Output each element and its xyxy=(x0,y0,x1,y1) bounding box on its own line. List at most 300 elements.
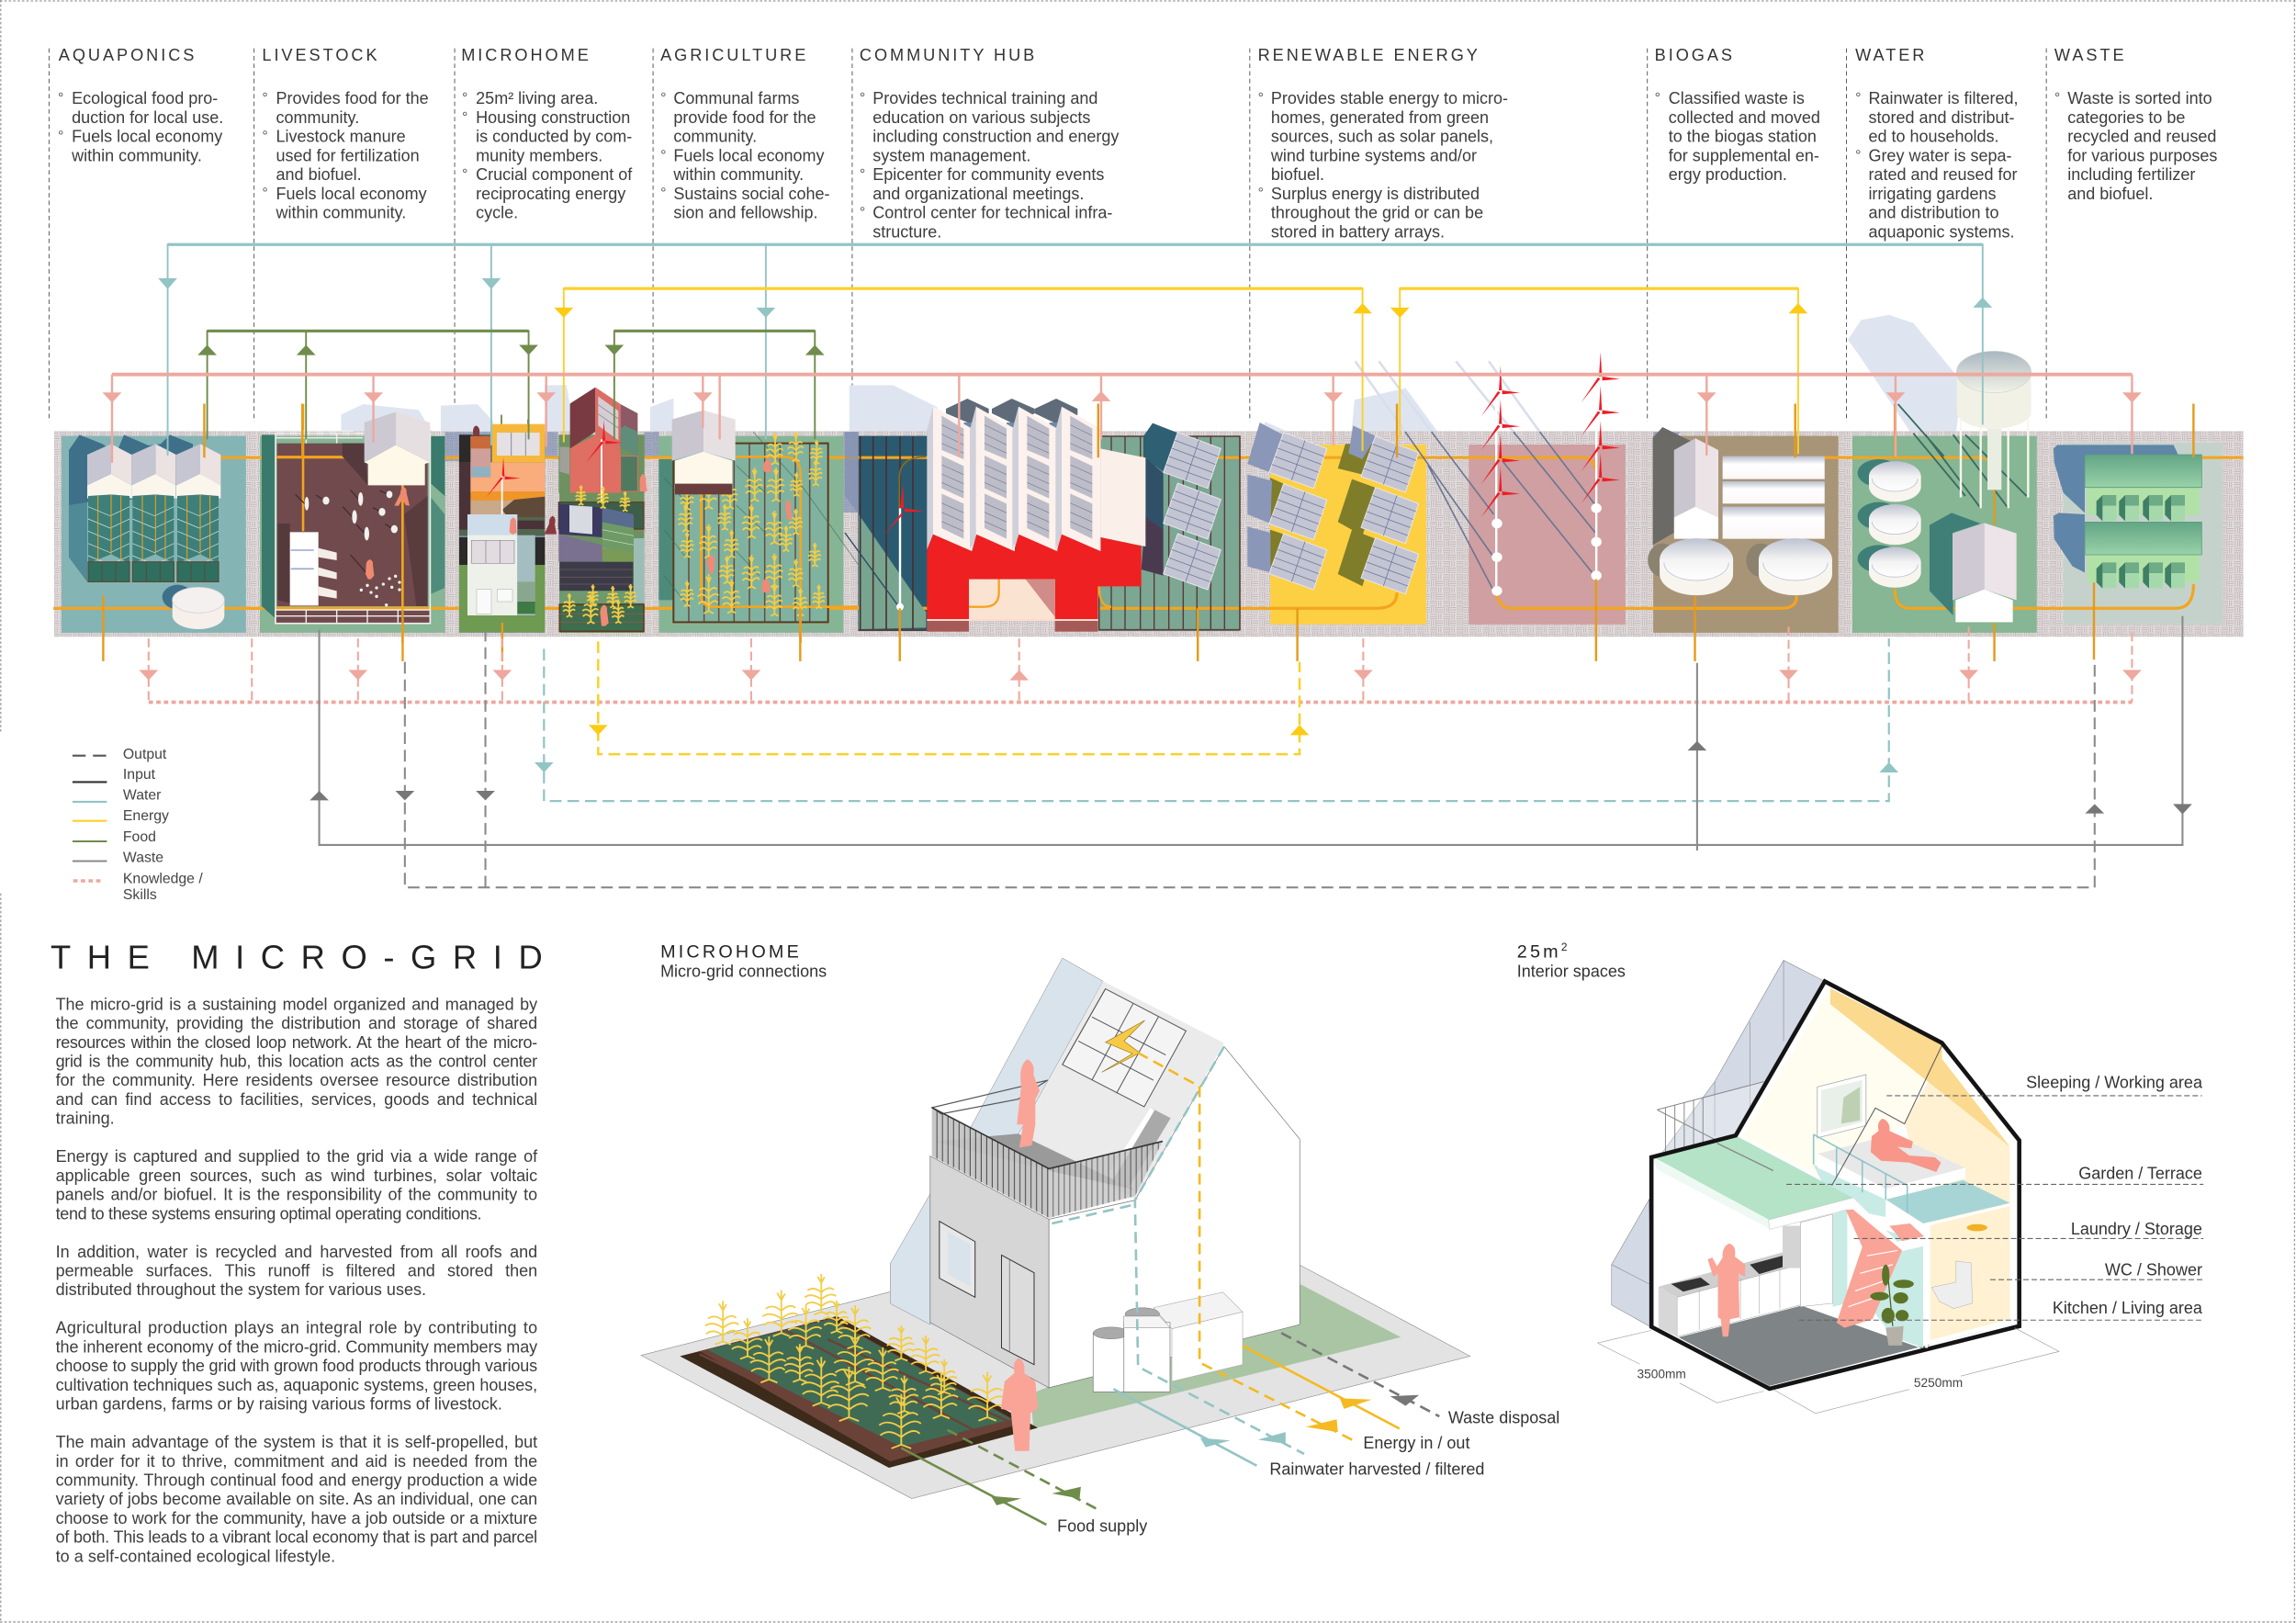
bullets: ° xyxy=(660,91,666,107)
paragraph 5: variety of jobs become available on site. As an individual, one can xyxy=(56,1490,537,1508)
bullet text: cycle. xyxy=(476,204,518,222)
plot: biogas xyxy=(1653,435,1839,633)
food arrows xyxy=(197,344,825,355)
plot: waste xyxy=(2063,443,2223,625)
reclining person xyxy=(1871,1119,1941,1172)
hub red base xyxy=(927,535,1142,619)
blue solar shadows on the paving xyxy=(1247,423,1376,572)
heading: RENEWABLE ENERGY xyxy=(1258,46,1480,64)
paragraph 1: for the community. Here residents oversee resource distribution xyxy=(56,1071,537,1089)
bullet text: structure. xyxy=(872,222,941,241)
bullet text: Fuels local economy xyxy=(276,185,427,203)
house shell xyxy=(1651,981,2020,1389)
legend: waste: Waste xyxy=(123,850,163,865)
water house xyxy=(1953,523,2017,622)
bullet text: Fuels local economy xyxy=(673,146,824,164)
map band of the closed-loop site xyxy=(53,351,2244,661)
heading: AQUAPONICS xyxy=(59,46,197,64)
paragraph 3: permeable surfaces. This runoff is filtered and stored then xyxy=(56,1262,537,1280)
sloped ceiling xyxy=(1830,988,2009,1146)
heading: microhome: Micro-grid connections xyxy=(660,962,827,980)
bullets: ° xyxy=(262,91,268,107)
legend: knowledge / skills xyxy=(73,871,203,903)
waste dashed line xyxy=(395,630,2104,887)
balcony railings xyxy=(932,1080,1163,1218)
energy supply lines xyxy=(554,288,1807,454)
paragraph 4: urban gardens, farms or by raising various forms of livestock. xyxy=(56,1395,502,1414)
bullets: ° xyxy=(462,91,467,107)
hub right plot stripes xyxy=(1099,423,1240,630)
label: laundry: Laundry / Storage xyxy=(2071,1220,2202,1238)
paragraph 5: community. Through continual food and energy production a wide xyxy=(56,1471,537,1490)
bullet text: and biofuel. xyxy=(276,165,362,184)
bullet text: Control center for technical infra- xyxy=(872,204,1112,222)
ladder stairs xyxy=(1837,1210,1902,1328)
paragraph 1: the community, providing the distribution and storage of shared xyxy=(56,1014,537,1032)
paragraph 3: In addition, water is recycled and harvested from all roofs and xyxy=(56,1243,537,1261)
person cooking xyxy=(1707,1244,1745,1336)
goats and chickens xyxy=(296,490,401,606)
plot: livestock xyxy=(260,435,445,633)
legend: output xyxy=(73,747,167,762)
plant xyxy=(1870,1265,1914,1346)
bullet text: stored in battery arrays. xyxy=(1271,222,1445,241)
heading: microhome xyxy=(660,942,827,980)
legend xyxy=(73,747,203,903)
panel: water xyxy=(1855,46,2019,241)
bed railing xyxy=(1814,1134,1908,1212)
heading: BIOGAS xyxy=(1655,46,1735,64)
heading: 25 m2: 25m xyxy=(1517,942,1561,963)
legend: input: Input xyxy=(123,767,156,783)
white gable wall xyxy=(1049,1046,1300,1388)
bullet text: and distribution to xyxy=(1868,204,1999,222)
biogas house xyxy=(1653,427,1718,545)
hub white wing xyxy=(1100,448,1145,547)
grey front wall xyxy=(930,1156,1049,1388)
agriculture corn xyxy=(678,432,825,616)
microhome, garden and agriculture xyxy=(459,388,918,643)
livestock people xyxy=(366,487,410,580)
paragraph 1: resources within the closed loop network. At the heart of the micro- xyxy=(56,1033,537,1052)
pitched roof xyxy=(1019,981,1224,1200)
bullet text: sources, such as solar panels, xyxy=(1271,128,1493,146)
bullet text: is conducted by com- xyxy=(476,128,632,146)
paragraph 4: the inherent economy of the micro-grid. Community members may xyxy=(56,1337,537,1356)
person at the front door xyxy=(1001,1358,1038,1451)
corn plants xyxy=(705,1274,1005,1448)
panel: livestock xyxy=(262,46,429,222)
blue shaded paving xyxy=(845,432,859,514)
label leader lines xyxy=(1786,1096,2203,1320)
bullet text: within community. xyxy=(276,204,406,222)
roof hatch xyxy=(1108,1108,1171,1188)
aquaponics shadow xyxy=(69,434,193,581)
dimension: width: 3500mm xyxy=(1638,1367,1686,1381)
paragraph 3: distributed throughout the system for various uses. xyxy=(56,1280,426,1299)
bullet text: Rainwater is filtered, xyxy=(1868,89,2019,107)
storage box xyxy=(1154,1292,1243,1381)
heading: WASTE xyxy=(2054,46,2127,64)
bullet text: wind turbine systems and/or xyxy=(1270,146,1477,164)
bullet text: and organizational meetings. xyxy=(872,185,1084,203)
water output line xyxy=(535,638,1898,801)
bullet text: biofuel. xyxy=(1271,165,1324,184)
bullet text: Crucial component of xyxy=(476,165,633,184)
orange pipe stubs xyxy=(103,403,2193,661)
bullet text: and biofuel. xyxy=(2067,185,2153,203)
paragraph 5: The main advantage of the system is that it is self-propelled, but xyxy=(56,1433,537,1451)
household water tanks xyxy=(1869,461,1921,588)
terrace gardens xyxy=(558,502,645,631)
bullet text: Provides food for the xyxy=(276,89,429,107)
bullet text: including fertilizer xyxy=(2067,165,2195,184)
paragraph 2: panels and/or biofuel. It is the responsibility of the community to xyxy=(56,1186,537,1204)
white microhome building xyxy=(467,514,535,615)
dimension: length: 5250mm xyxy=(1914,1376,1963,1390)
garden corn xyxy=(563,485,636,626)
paragraph 5: in order for it to thrive, commitment and aid is needed from the xyxy=(56,1452,537,1471)
greenhouses xyxy=(87,444,220,581)
wind turbine poles xyxy=(1491,374,1602,596)
paragraph 5: to a self-contained ecological lifestyle. xyxy=(56,1547,335,1565)
panel: waste xyxy=(2054,46,2217,203)
food supply flows xyxy=(901,1430,1101,1525)
wind turbine rotors xyxy=(1481,352,1620,517)
paragraph 4: cultivation techniques such as, aquaponic systems, green houses, xyxy=(56,1376,537,1394)
waste sorting block upper xyxy=(2085,455,2201,521)
heading: MICROHOME xyxy=(461,46,591,64)
hub blue gaps xyxy=(963,423,1058,542)
balcony railing xyxy=(1657,1082,1773,1169)
pale building shadows above the band xyxy=(341,315,1962,432)
energy in and out flows xyxy=(1138,1053,1400,1440)
plot: community hub right xyxy=(1098,435,1240,631)
bullet text: within community. xyxy=(71,146,202,164)
small wind turbine xyxy=(884,484,924,611)
water tower xyxy=(1956,351,2032,525)
bullets: ° xyxy=(860,91,865,107)
legend: water xyxy=(73,788,161,804)
bullet text: aquaponic systems. xyxy=(1868,222,2015,241)
heading: 25 m2 xyxy=(1517,941,1626,980)
right wall xyxy=(1905,1059,2009,1340)
agriculture people xyxy=(706,458,792,592)
bullets: ° xyxy=(1855,148,1861,163)
solar array with bolt xyxy=(1063,989,1186,1107)
window xyxy=(1818,1075,1866,1138)
bullet text: Ecological food pro- xyxy=(72,89,218,107)
legend: waste xyxy=(73,850,163,865)
bullet text: ergy production. xyxy=(1669,165,1787,184)
bullet text: Waste is sorted into xyxy=(2067,89,2212,107)
panel: community hub xyxy=(860,46,1119,241)
renewable energy, wind turbines and biogas xyxy=(1270,352,1832,596)
bullets: ° xyxy=(262,129,268,144)
heading: AGRICULTURE xyxy=(660,46,808,64)
legend: input xyxy=(73,767,156,783)
wind turbine field shadows xyxy=(1405,432,1595,591)
heading: LIVESTOCK xyxy=(262,46,380,64)
bullets: ° xyxy=(1258,186,1264,201)
window xyxy=(940,1222,975,1297)
bullets: ° xyxy=(860,205,865,220)
column divider lines xyxy=(49,49,2046,422)
energy output line xyxy=(589,641,1309,754)
paragraph 5: choose to work for the community, have a job outside or a mixture xyxy=(56,1509,537,1527)
legend: food: Food xyxy=(123,829,156,845)
bullets: ° xyxy=(462,109,467,125)
bullet text: irrigating gardens xyxy=(1868,185,1997,203)
bullet text: stored and distribut- xyxy=(1868,108,2015,127)
water arrows xyxy=(158,278,1992,318)
terrace slab xyxy=(1652,1137,1857,1229)
bullet text: Provides stable energy to micro- xyxy=(1271,89,1508,107)
plot: community hub left xyxy=(858,435,929,631)
interior section diagram xyxy=(1597,960,2203,1414)
knowledge input lines xyxy=(103,375,2142,463)
inner wall division xyxy=(1927,1205,2009,1348)
woven paving band xyxy=(54,431,2244,637)
bullet text: categories to be xyxy=(2067,108,2185,127)
bullet text: Surplus energy is distributed xyxy=(1271,185,1480,203)
bullet text: education on various subjects xyxy=(872,108,1090,127)
bullet text: system management. xyxy=(872,146,1030,164)
paragraph 2: Energy is captured and supplied to the grid via a wide range of xyxy=(56,1147,538,1166)
bullet text: for various purposes xyxy=(2067,146,2217,164)
plot: water xyxy=(1852,435,2037,633)
livestock yard xyxy=(262,404,445,643)
bullets: ° xyxy=(860,167,865,183)
floor xyxy=(1679,1306,2008,1386)
hub roof vents xyxy=(946,399,1077,424)
paragraph 1: The micro-grid is a sustaining model organized and managed by xyxy=(56,995,537,1013)
knowledge output arrows xyxy=(139,670,2142,681)
balcony floor xyxy=(934,1133,1135,1189)
food supply lines xyxy=(197,331,825,439)
microhome isometric diagram xyxy=(641,958,1470,1525)
left gable wall xyxy=(1743,988,1941,1184)
plot: neighbouring garden xyxy=(559,435,645,633)
biogas tank xyxy=(163,585,224,629)
label: rainwater: Rainwater harvested / filtered xyxy=(1269,1460,1484,1479)
waste sorting block lower xyxy=(2085,522,2201,589)
paragraph 1: and can find access to facilities, services, goods and technical xyxy=(56,1090,537,1109)
kitchen counter xyxy=(1659,1226,1801,1336)
bullets: ° xyxy=(2054,91,2060,107)
bullets: ° xyxy=(1258,91,1264,107)
bullet text: sion and fellowship. xyxy=(673,204,818,222)
bullet text: for supplemental en- xyxy=(1669,146,1819,164)
bullet text: provide food for the xyxy=(673,108,816,127)
legend: knowledge / skills: Knowledge / xyxy=(123,871,203,886)
bullets: ° xyxy=(660,186,666,201)
bullet text: Sustains social cohe- xyxy=(673,185,830,203)
panel: agriculture xyxy=(660,46,830,222)
waste arrows xyxy=(310,741,2192,814)
panel: renewable energy xyxy=(1258,46,1508,241)
biogas tanks xyxy=(1648,538,1832,595)
bullets: ° xyxy=(660,148,666,163)
glass frame xyxy=(1832,1045,1941,1186)
fridge xyxy=(1800,1214,1833,1307)
bullet text: Epicenter for community events xyxy=(872,165,1104,184)
bullet text: Livestock manure xyxy=(276,128,406,146)
aquaponics and livestock buildings xyxy=(69,404,445,643)
bullets: ° xyxy=(462,167,467,183)
bullet text: rated and reused for xyxy=(1868,165,2018,184)
waste disposal flow xyxy=(1281,1333,1439,1416)
bullet text: ed to households. xyxy=(1868,128,1999,146)
water output arrows xyxy=(535,762,1898,772)
plot: renewable energy xyxy=(1270,445,1426,625)
bullet text: community. xyxy=(276,108,359,127)
bullets: ° xyxy=(58,129,63,144)
shower head xyxy=(1967,1224,1987,1231)
panel: microhome xyxy=(461,46,633,222)
hub entrance xyxy=(927,580,1097,632)
tank shadows xyxy=(1858,459,1981,615)
paragraph 5: of both. This leads to a vibrant local economy that is part and parcel xyxy=(56,1528,537,1547)
paragraph 4: choose to supply the grid with grown food products through various xyxy=(56,1357,537,1375)
bullet text: Grey water is sepa- xyxy=(1868,146,2012,164)
bed xyxy=(1818,1134,1965,1200)
waste solid line xyxy=(310,616,2192,851)
energy output arrows xyxy=(589,725,1309,735)
bullet text: duction for local use. xyxy=(72,108,223,127)
livestock house xyxy=(365,411,430,485)
ground plate xyxy=(641,1266,1470,1499)
waste shadows xyxy=(2054,445,2178,572)
waste dashed arrows xyxy=(395,791,2104,814)
paragraph 4: Agricultural production plays an integral role by contributing to xyxy=(56,1319,537,1337)
legend: energy: Energy xyxy=(123,808,169,824)
bullet text: to the biogas station xyxy=(1669,128,1817,146)
mezzanine slab xyxy=(1846,1198,1924,1252)
paragraph 2: tend to these systems ensuring optimal operating conditions. xyxy=(56,1204,482,1223)
bullets: ° xyxy=(1655,91,1660,107)
microhome plot xyxy=(459,434,545,632)
legend: food xyxy=(73,829,156,845)
community hub and solar panels xyxy=(845,399,1419,632)
water and waste xyxy=(1858,351,2201,622)
dimension lines xyxy=(1597,1328,2059,1414)
microhome flow labels xyxy=(1057,1409,1559,1536)
bullet text: recycled and reused xyxy=(2067,128,2216,146)
pale wind turbine shadows above the band xyxy=(1356,361,1539,432)
lower-left white wall xyxy=(1657,1169,1783,1336)
hub solar panels xyxy=(1164,433,1221,590)
knowledge arrows xyxy=(103,391,2142,402)
blue glass back panels xyxy=(1612,960,1825,1328)
bullets: ° xyxy=(58,91,63,107)
heading: COMMUNITY HUB xyxy=(860,46,1037,64)
hub left plot stripes xyxy=(845,436,927,630)
energy arrows xyxy=(554,303,1807,318)
bullet text: homes, generated from green xyxy=(1271,108,1489,127)
blue tint across the paving xyxy=(445,432,1681,513)
bullet text: reciprocating energy xyxy=(476,185,625,203)
blue-green wall panels xyxy=(1813,1165,1923,1348)
title: THE MICRO-GRID xyxy=(51,938,543,975)
tower leg shadows xyxy=(1898,404,2027,508)
bullet text: including construction and energy xyxy=(872,128,1119,146)
legend: output: Output xyxy=(123,747,167,762)
agriculture house xyxy=(672,411,736,494)
rain water tanks xyxy=(1093,1308,1170,1392)
paragraph 1: grid is the community hub, this location acts as the control center xyxy=(56,1053,537,1071)
plot: aquaponics xyxy=(62,435,246,633)
bullet text: Communal farms xyxy=(673,89,799,107)
panel: biogas xyxy=(1655,46,1820,184)
barn xyxy=(290,532,337,605)
body text xyxy=(56,995,538,1565)
knowledge output lines xyxy=(139,626,2142,703)
olive solar shadows xyxy=(1270,444,1378,586)
paragraph 2: applicable green sources, such as wind turbines, solar voltaic xyxy=(56,1167,537,1185)
bullet text: munity members. xyxy=(476,146,602,164)
label: wc: WC / Shower xyxy=(2105,1261,2202,1279)
agriculture field xyxy=(658,432,918,643)
bullets: ° xyxy=(1855,91,1861,107)
label: waste disposal: Waste disposal xyxy=(1448,1409,1559,1427)
renewable energy solar panels xyxy=(1269,433,1419,594)
person on the balcony xyxy=(1017,1059,1040,1147)
plot: wind turbines xyxy=(1469,445,1626,625)
livestock fences xyxy=(266,431,430,624)
heading: WATER xyxy=(1855,46,1927,64)
upper floor xyxy=(1885,1180,2009,1223)
orange utility pipes xyxy=(53,457,2244,608)
heading: microhome: MICROHOME xyxy=(660,942,802,963)
site plots xyxy=(53,435,2244,633)
bullet text: used for fertilization xyxy=(276,146,420,164)
door xyxy=(1001,1255,1034,1365)
bullet text: Fuels local economy xyxy=(72,128,222,146)
legend: energy xyxy=(73,808,169,824)
toilet xyxy=(1931,1261,1973,1309)
dimension labels xyxy=(1638,1367,1963,1390)
house outline xyxy=(1651,981,2020,1389)
legend: water: Water xyxy=(123,788,161,804)
heading: 25 m2: 2 xyxy=(1561,941,1570,953)
bullet text: collected and moved xyxy=(1669,108,1820,127)
bullet text: Provides technical training and xyxy=(872,89,1097,107)
label: garden: Garden / Terrace xyxy=(2078,1164,2202,1182)
bullets: ° xyxy=(262,186,268,201)
bullet text: community. xyxy=(673,128,757,146)
biogas cylinders xyxy=(1723,456,1825,539)
rainwater flows xyxy=(1052,1046,1304,1466)
bullet text: Housing construction xyxy=(476,108,630,127)
interior labels xyxy=(2026,1074,2203,1317)
paragraph 1: training. xyxy=(56,1110,115,1128)
bullet text: within community. xyxy=(672,165,804,184)
label: kitchen: Kitchen / Living area xyxy=(2053,1299,2203,1317)
heading: 25 m2: Interior spaces xyxy=(1517,962,1626,980)
garden beds xyxy=(680,1316,1038,1468)
green lawn strip xyxy=(1030,1285,1401,1428)
bullet text: throughout the grid or can be xyxy=(1271,204,1483,222)
hub solar fins xyxy=(927,407,1100,551)
bullet text: 25m² living area. xyxy=(476,89,598,107)
bullet text: Classified waste is xyxy=(1669,89,1805,107)
panel: aquaponics xyxy=(58,46,223,164)
legend: knowledge / skills: Skills xyxy=(123,887,157,903)
plot: microhome xyxy=(459,435,545,633)
water supply lines xyxy=(158,244,1992,456)
label: sleeping: Sleeping / Working area xyxy=(2026,1074,2203,1092)
